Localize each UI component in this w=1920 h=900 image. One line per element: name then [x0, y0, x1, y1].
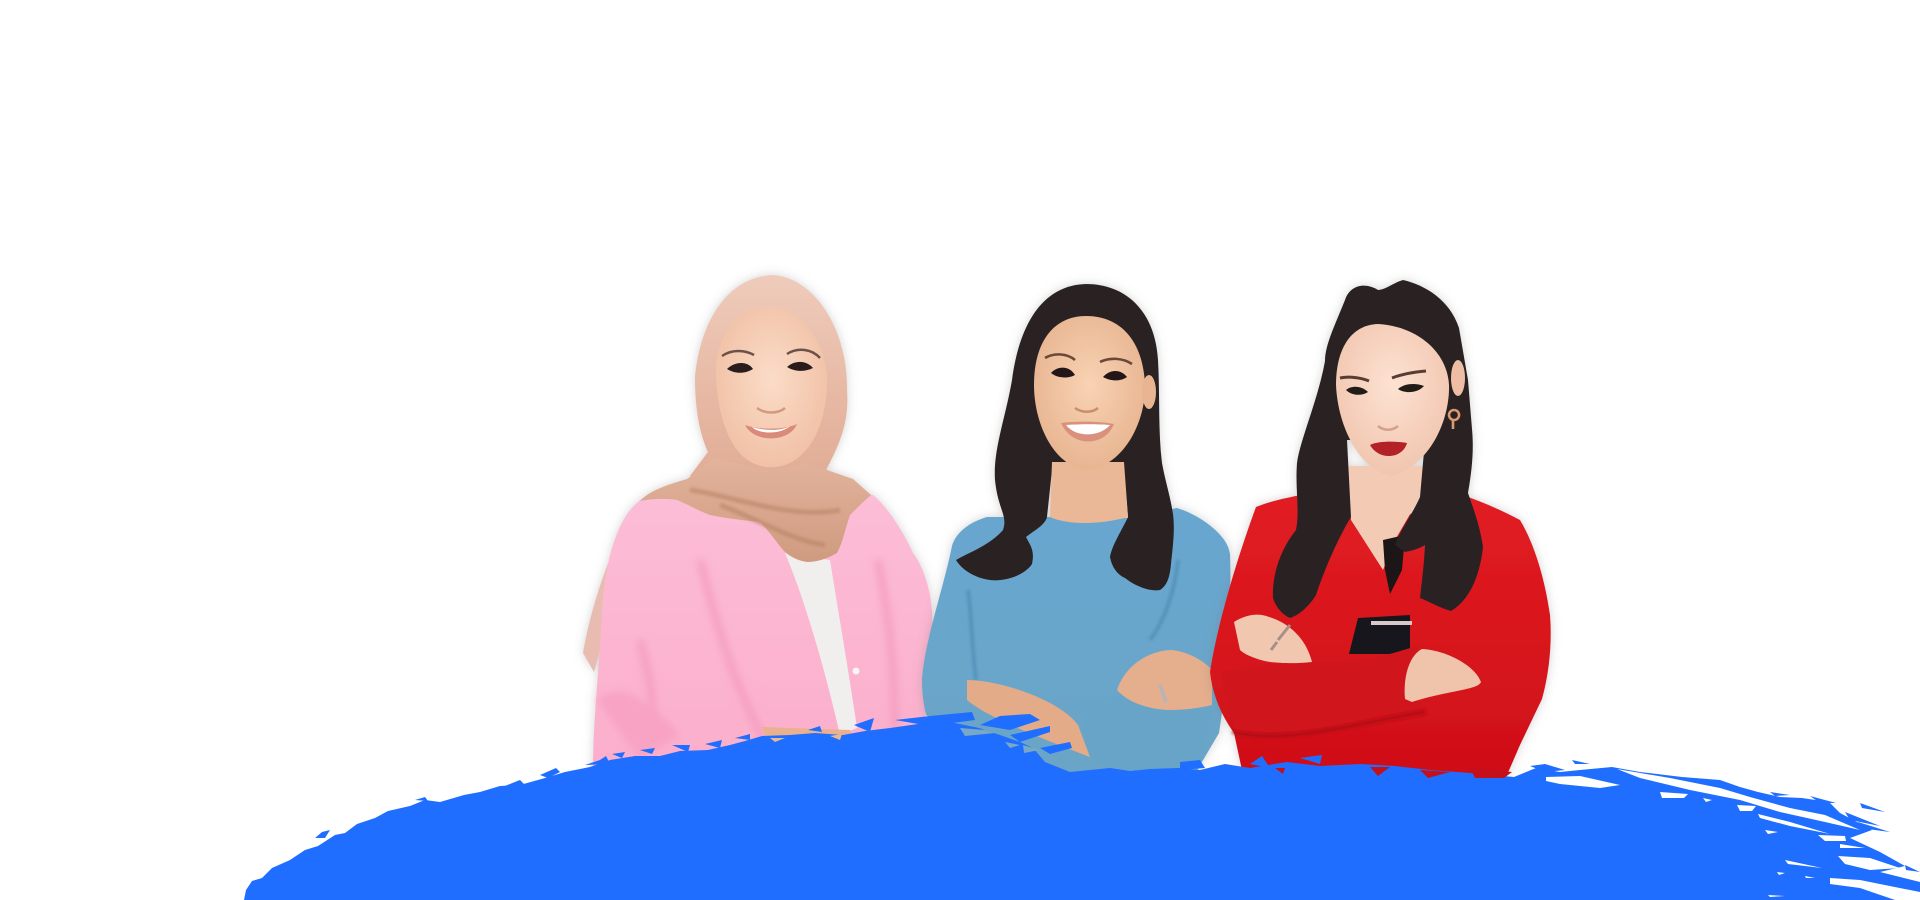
scarf tail behind body [583, 500, 640, 672]
main stroke body [244, 722, 1920, 900]
face [1336, 324, 1449, 476]
eyes and brows [722, 350, 820, 358]
hijab [690, 275, 847, 505]
left fringe flecks [315, 712, 975, 838]
ear [1451, 360, 1465, 396]
neck [1050, 462, 1128, 523]
brush fringe: clothing showing through blue stroke [770, 728, 1512, 778]
black inner pocket [1349, 615, 1410, 654]
forearm sleeve shading [1220, 645, 1420, 737]
hand with ring [1117, 650, 1212, 710]
sleeve [1078, 695, 1212, 775]
nose and mouth [757, 408, 785, 412]
face [716, 307, 827, 467]
right hand [1405, 649, 1481, 702]
hand [762, 727, 853, 748]
right top fleck streaks [1530, 760, 1920, 872]
eyes and brows [1340, 371, 1426, 381]
face [1034, 316, 1145, 470]
button [852, 668, 860, 674]
hair [1273, 280, 1483, 618]
person: woman in pink with hijab [583, 275, 940, 790]
nose and mouth [1075, 408, 1098, 412]
brush stroke: white dry-bristle gaps [1546, 760, 1920, 900]
forearm [967, 680, 1090, 757]
red jacket [1210, 495, 1551, 775]
ear [1142, 375, 1156, 409]
eyes and brows [1045, 354, 1132, 364]
pink shirt [593, 495, 940, 790]
hair [956, 284, 1174, 590]
fringe over blue top [980, 714, 1072, 754]
blue top [922, 508, 1230, 790]
earring [1449, 410, 1459, 429]
brooch [1371, 621, 1412, 625]
white tee [785, 553, 857, 735]
black V undershirt [1383, 535, 1405, 594]
nose and mouth [1378, 426, 1398, 430]
neck and chest [1347, 466, 1424, 570]
person: woman in red [1210, 280, 1551, 775]
brush stroke: blue paint [244, 712, 1920, 900]
person: woman in blue [922, 284, 1230, 790]
left hand with rings [1234, 615, 1312, 663]
scarf wrap [640, 458, 871, 562]
